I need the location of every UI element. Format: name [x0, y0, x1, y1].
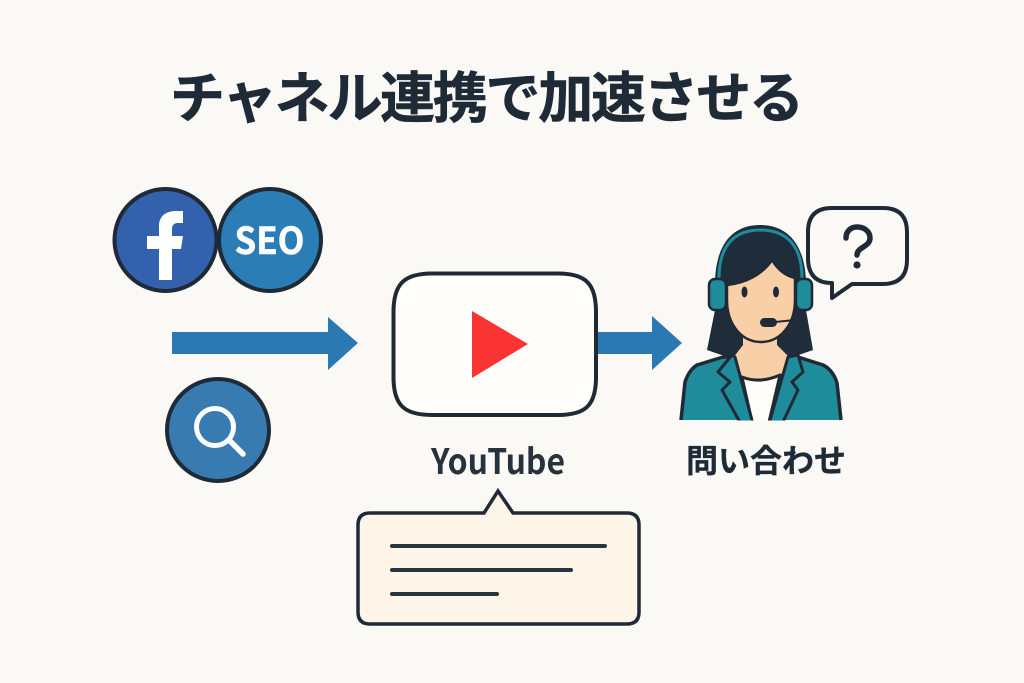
ear cups — [709, 279, 726, 310]
mic — [775, 320, 795, 322]
neck — [735, 338, 788, 378]
jacket — [681, 357, 841, 420]
arrow: channels to YouTube — [172, 317, 358, 370]
icon: question bubble — [808, 208, 907, 298]
label: inquiry: 問い合わせ — [686, 436, 846, 482]
left lapel — [718, 355, 753, 424]
title: チャネル連携で加速させる — [170, 54, 804, 134]
icon: facebook — [114, 189, 216, 291]
callout — [358, 491, 639, 624]
icon: SEO: SEO — [234, 211, 304, 265]
icon: support agent — [681, 225, 841, 424]
back hair — [707, 225, 813, 358]
label: YouTube: YouTube — [430, 434, 565, 485]
right lapel — [769, 355, 803, 424]
eyes — [742, 286, 748, 298]
icon: YouTube player — [394, 274, 596, 415]
icon: SEO — [219, 189, 321, 291]
headset band — [719, 230, 802, 278]
icon: search — [167, 379, 269, 481]
face — [727, 260, 795, 342]
arrow: YouTube to inquiry — [598, 316, 682, 370]
shirt — [742, 375, 780, 422]
